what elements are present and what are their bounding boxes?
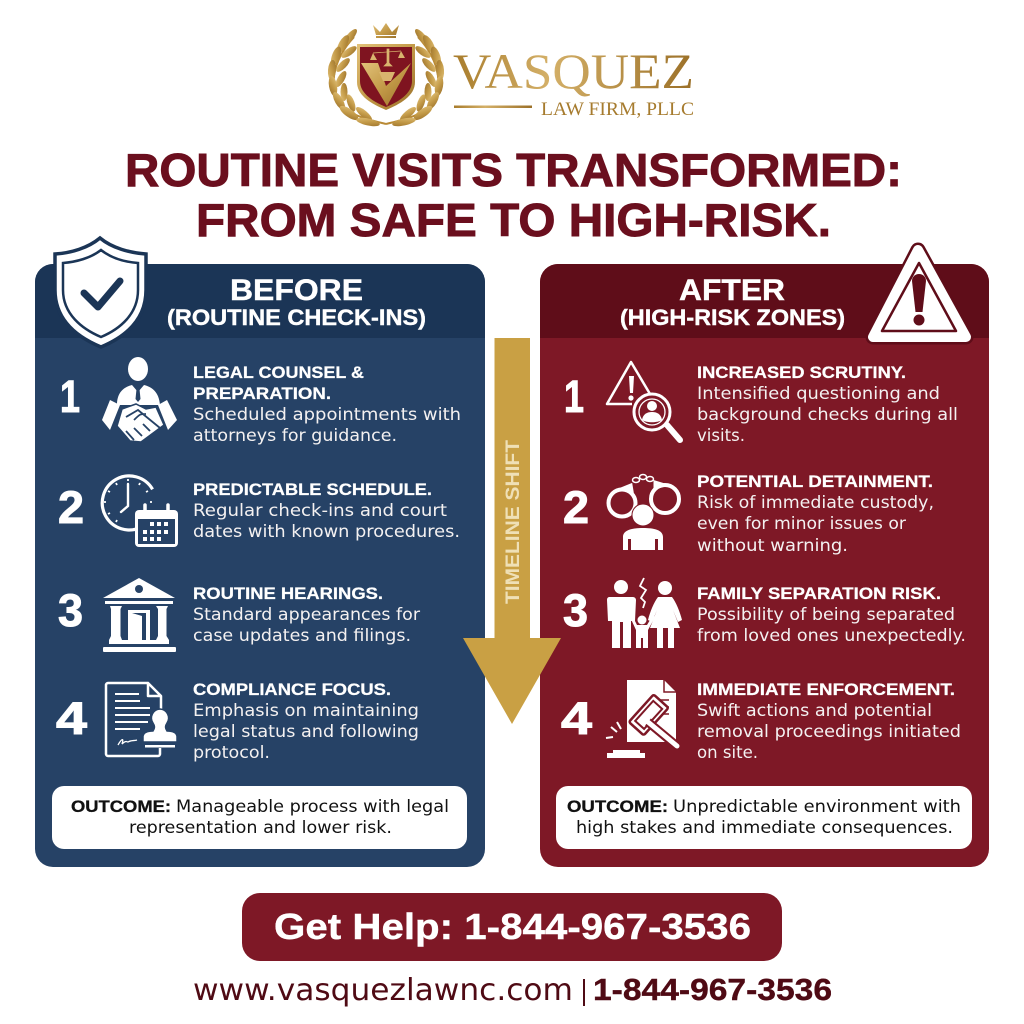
outcome box: before: representation and lower risk. [129, 818, 392, 838]
panel background [540, 264, 989, 867]
heading: before [167, 274, 426, 330]
item text [193, 584, 420, 646]
item text: PREDICTABLE SCHEDULE. [193, 480, 432, 499]
item text: COMPLIANCE FOCUS. [193, 680, 391, 699]
heading: before: BEFORE [230, 274, 363, 307]
number 2: 2 [58, 482, 84, 533]
item 1: increased scrutiny [564, 362, 958, 446]
item text: legal status and following [193, 722, 419, 742]
number 2: 2 [563, 482, 589, 533]
item text: Regular check-ins and court [193, 501, 447, 521]
outcome box: before [52, 786, 467, 849]
item text: INCREASED SCRUTINY. [697, 363, 906, 382]
item text: attorneys for guidance. [193, 426, 397, 446]
item 4: compliance focus [56, 680, 419, 763]
item 4: immediate enforcement [561, 680, 961, 763]
icon: courthouse [103, 578, 176, 652]
footer contact line: www.vasquezlawnc.com [193, 973, 573, 1008]
outcome box: before: Manageable process with legal [176, 797, 449, 817]
logo wordmark: VASQUEZ [453, 43, 694, 99]
icon: clock and calendar [94, 468, 178, 547]
call to action button: Get Help: 1-844-967-3536 [274, 906, 751, 947]
item text: POTENTIAL DETAINMENT. [697, 472, 933, 491]
icon: shield with check [55, 238, 146, 347]
number 3: 3 [563, 585, 588, 636]
item text [697, 584, 966, 646]
icon: gavel and document [606, 680, 678, 758]
outcome box: before: OUTCOME: [71, 797, 171, 816]
panel header band [540, 264, 989, 338]
number 1: 1 [60, 371, 80, 422]
item 2: potential detainment [563, 472, 934, 556]
logo rule [454, 106, 532, 108]
panel header band [35, 264, 485, 338]
heading: after: AFTER [679, 274, 785, 307]
heading: after [620, 274, 845, 330]
panel: before [35, 238, 485, 867]
title: FROM SAFE TO HIGH-RISK. [196, 194, 831, 246]
item text: Standard appearances for [193, 605, 420, 625]
item text: Intensified questioning and [697, 384, 940, 404]
icon: warning triangle [873, 250, 966, 337]
item text: Emphasis on maintaining [193, 701, 419, 721]
outcome box: after: high stakes and immediate consequences. [576, 818, 953, 838]
title: ROUTINE VISITS TRANSFORMED: [125, 144, 902, 196]
panel: after [540, 250, 989, 867]
item text: protocol. [193, 743, 270, 763]
number 3: 3 [58, 585, 83, 636]
item text: removal proceedings initiated [697, 722, 961, 742]
item 2: predictable schedule [58, 468, 460, 547]
item 1: legal counsel [60, 357, 461, 446]
number 1: 1 [564, 371, 584, 422]
icon: handcuffs and person [608, 474, 679, 550]
arrow: timeline shift [463, 338, 561, 724]
item text [193, 480, 460, 542]
item text: PREPARATION. [193, 384, 331, 403]
item text [193, 680, 419, 763]
item text [697, 472, 934, 556]
outcome box: after: OUTCOME: [567, 797, 668, 816]
number 4: 4 [56, 693, 87, 744]
number 4: 4 [561, 693, 592, 744]
item text [697, 363, 958, 446]
icon: attorney handshake [102, 357, 177, 442]
heading: before: (ROUTINE CHECK-INS) [167, 305, 426, 330]
panel background [35, 264, 485, 867]
item text: on site. [697, 743, 758, 763]
item text: background checks during all [697, 405, 958, 425]
icon: separated family [607, 578, 682, 648]
icon: document and stamp [106, 683, 177, 756]
item text: without warning. [697, 536, 848, 556]
item text: even for minor issues or [697, 514, 906, 534]
icon: crest shield [357, 44, 415, 110]
item 3: routine hearings [58, 578, 420, 652]
icon: warning and magnifier [607, 362, 680, 440]
footer contact line [193, 972, 832, 1008]
item text: from loved ones unexpectedly. [697, 626, 966, 646]
item text [697, 680, 961, 763]
title [125, 144, 902, 246]
item text: ROUTINE HEARINGS. [193, 584, 383, 603]
item text: IMMEDIATE ENFORCEMENT. [697, 680, 955, 699]
call to action button [242, 893, 782, 961]
heading: after: (HIGH-RISK ZONES) [620, 305, 845, 330]
logo: Vasquez Law Firm [327, 23, 694, 128]
item text: Swift actions and potential [697, 701, 932, 721]
arrow label: TIMELINE SHIFT [503, 440, 524, 604]
outcome box: after [556, 786, 972, 849]
item text: Scheduled appointments with [193, 405, 461, 425]
item text: case updates and filings. [193, 626, 411, 646]
icon: crown [373, 23, 399, 38]
item text: visits. [697, 426, 745, 446]
footer contact line: 1-844-967-3536 [593, 972, 832, 1007]
item text: Possibility of being separated [697, 605, 955, 625]
icon: laurel wreath [327, 27, 445, 128]
logo tagline: LAW FIRM, PLLC [541, 99, 694, 120]
outcome box: after: Unpredictable environment with [673, 797, 961, 817]
item text: FAMILY SEPARATION RISK. [697, 584, 941, 603]
item text: LEGAL COUNSEL & [193, 363, 364, 382]
item 3: family separation risk [563, 578, 966, 648]
item text [193, 363, 461, 446]
item text: Risk of immediate custody, [697, 493, 934, 513]
item text: dates with known procedures. [193, 522, 460, 542]
